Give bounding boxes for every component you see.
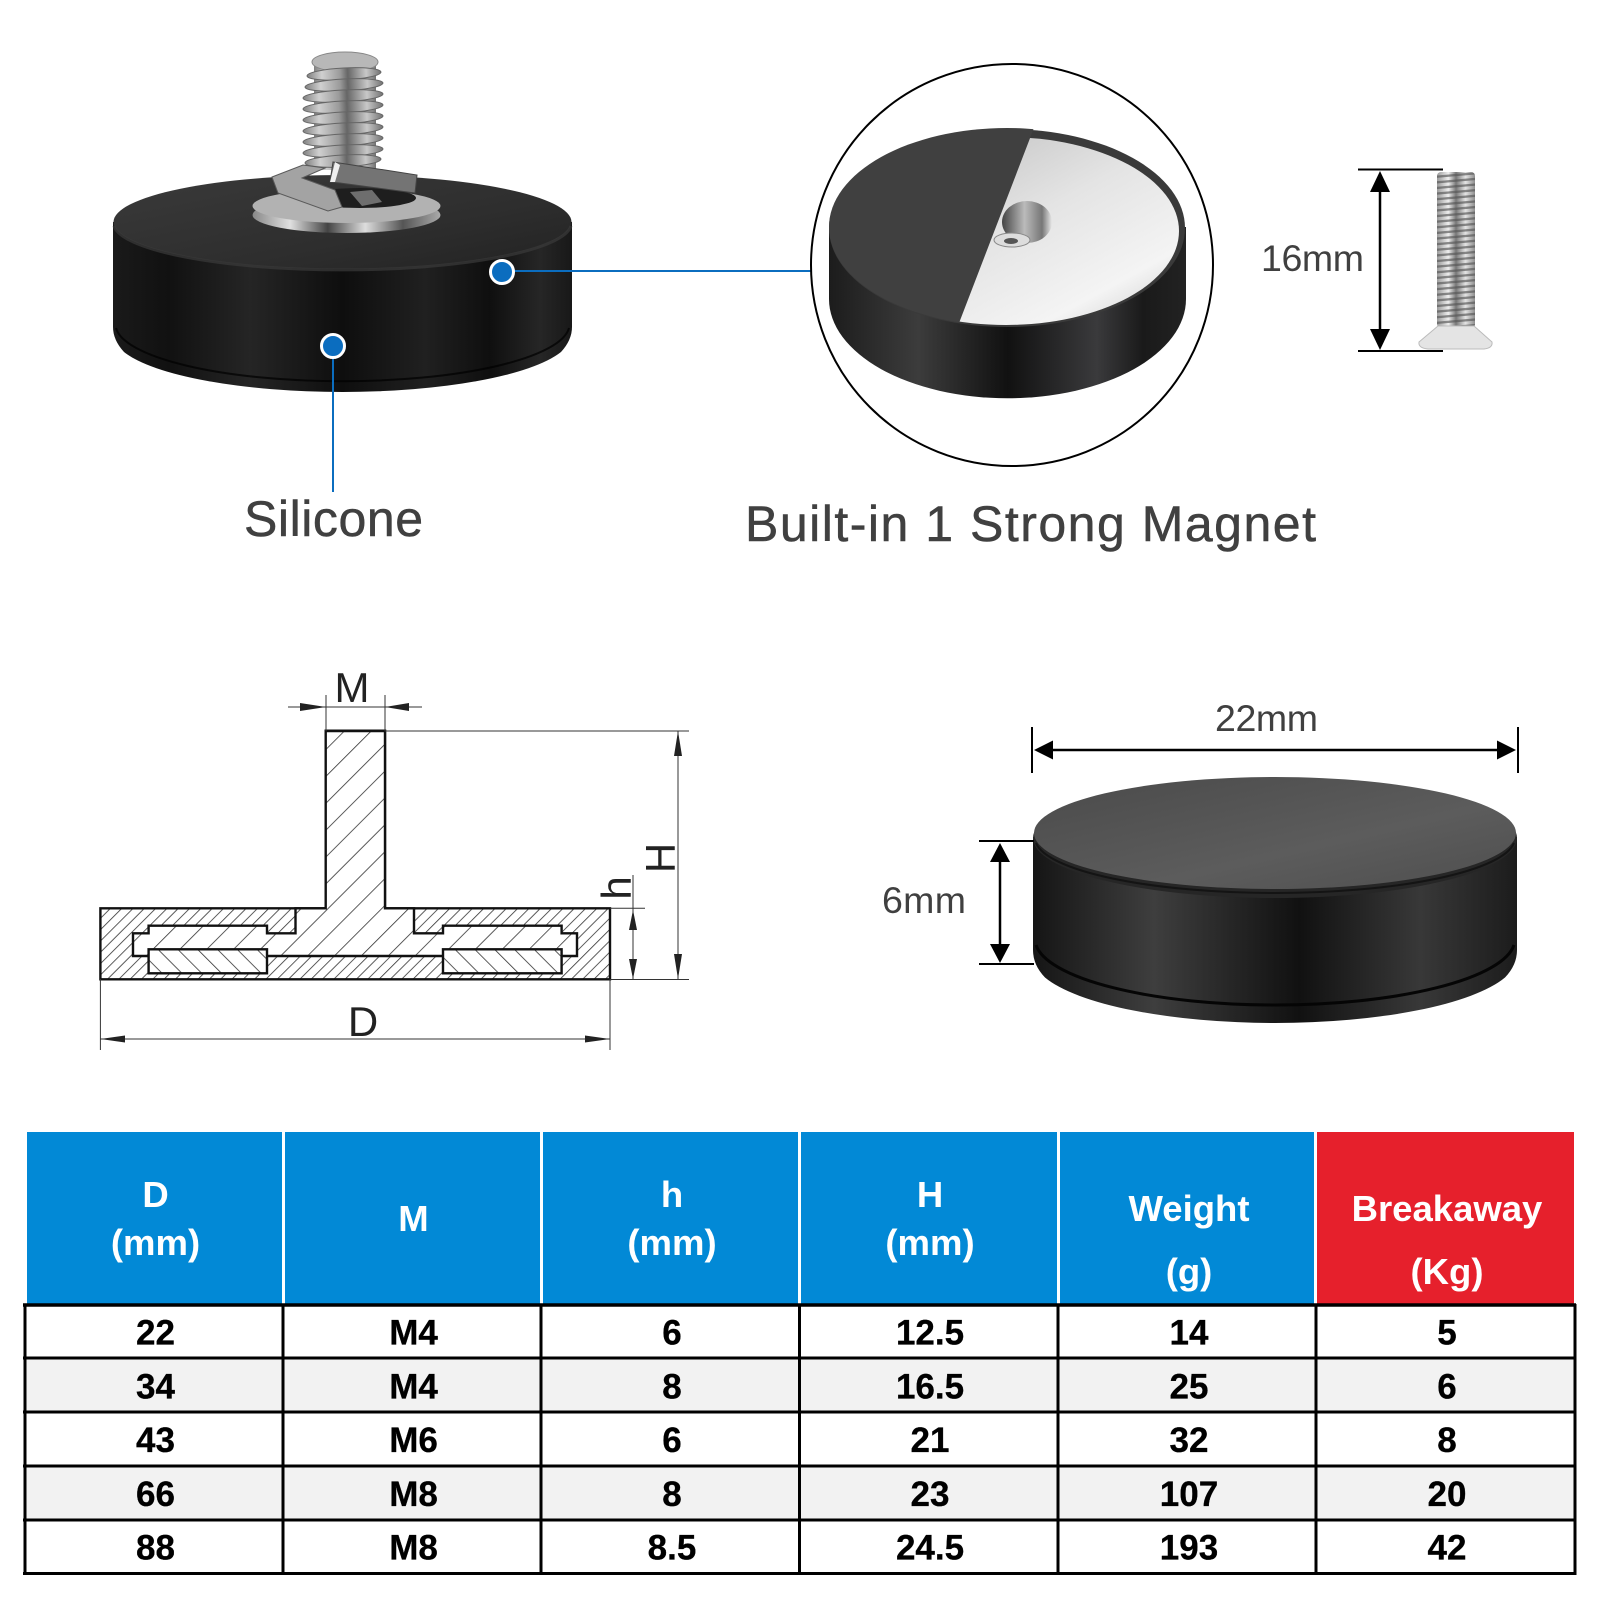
dimension H: H <box>637 843 684 873</box>
table values: M4 <box>389 1314 438 1352</box>
dimension h: h <box>593 876 640 900</box>
table values: 16.5 <box>896 1368 964 1406</box>
magnet hole <box>994 201 1052 247</box>
product photo: magnet puck with dimensions <box>1033 777 1517 1023</box>
header row: (Kg) <box>1411 1251 1483 1292</box>
header row: D <box>142 1174 169 1215</box>
table grid <box>23 1304 1576 1575</box>
dimension: 22mm <box>1032 697 1518 773</box>
dimension D: D <box>348 998 378 1045</box>
product photo: silicone magnet with threaded stud <box>113 52 572 392</box>
table values: 8 <box>662 1368 682 1406</box>
table values: 6 <box>662 1421 682 1460</box>
table values: 193 <box>1160 1528 1218 1568</box>
dimension M: M <box>334 664 370 711</box>
table values: 6 <box>1437 1368 1457 1406</box>
dimension: 6mm <box>882 841 1034 964</box>
table values: 107 <box>1160 1475 1218 1514</box>
header row: Breakaway <box>1352 1188 1543 1229</box>
dimension: 6mm: 6mm <box>882 879 966 921</box>
table values: 43 <box>136 1421 175 1460</box>
dimension h <box>593 875 645 979</box>
label: Built-in 1 Strong Magnet: Built-in 1 Strong Magnet <box>745 496 1316 552</box>
dimension M <box>288 664 422 731</box>
table values: 8.5 <box>648 1528 696 1568</box>
table values: 12.5 <box>896 1314 964 1352</box>
table values: 8 <box>662 1475 682 1514</box>
table values: 34 <box>136 1368 175 1406</box>
header row: (g) <box>1166 1251 1212 1292</box>
dimension H <box>385 731 689 980</box>
table values: 22 <box>136 1314 175 1352</box>
callout dot: silicone <box>322 334 344 358</box>
table values: 42 <box>1428 1528 1466 1568</box>
specification table <box>23 1132 1576 1575</box>
table values: 25 <box>1170 1368 1208 1406</box>
header row: (mm) <box>885 1222 975 1263</box>
dimension: 22mm: 22mm <box>1215 697 1318 739</box>
table values: M8 <box>389 1528 438 1568</box>
table values: M4 <box>389 1368 438 1406</box>
puck body <box>113 222 572 392</box>
technical drawing: cross-section <box>100 664 689 1050</box>
table values: 66 <box>136 1475 175 1514</box>
table values: M8 <box>389 1475 438 1514</box>
table values: 6 <box>662 1314 682 1352</box>
table values: 8 <box>1437 1421 1457 1460</box>
table values: 88 <box>136 1528 175 1568</box>
icon: countersunk screw <box>1419 172 1492 349</box>
header row: Weight <box>1129 1188 1249 1229</box>
header row <box>27 1132 1574 1304</box>
flat washer <box>252 188 440 233</box>
dimension D <box>100 979 610 1050</box>
table values: 14 <box>1170 1314 1209 1352</box>
table values: 23 <box>911 1475 949 1514</box>
screw dimension: 16mm <box>1261 170 1443 351</box>
silicone half cover <box>829 128 1034 322</box>
threaded stud <box>303 52 383 170</box>
callout dot: magnet <box>490 260 514 284</box>
table values: 24.5 <box>896 1528 964 1568</box>
screw dimension: 16mm: 16mm <box>1261 237 1364 279</box>
callout lines <box>333 271 812 492</box>
table values: 21 <box>911 1421 949 1460</box>
table values: 5 <box>1437 1314 1457 1352</box>
detail circle: cutaway magnet <box>811 64 1213 466</box>
header row: H <box>917 1174 943 1215</box>
table values <box>136 1314 1466 1568</box>
table values: M6 <box>389 1421 438 1460</box>
table values: 20 <box>1428 1475 1466 1514</box>
table values: 32 <box>1170 1421 1208 1460</box>
header row: h <box>661 1174 683 1215</box>
section body <box>100 731 610 979</box>
row shading <box>26 1358 1574 1519</box>
spring washer <box>272 162 417 211</box>
label: Silicone: Silicone <box>244 491 423 547</box>
header row: M <box>398 1198 429 1239</box>
header row: (mm) <box>111 1222 200 1263</box>
header row: (mm) <box>627 1222 717 1263</box>
